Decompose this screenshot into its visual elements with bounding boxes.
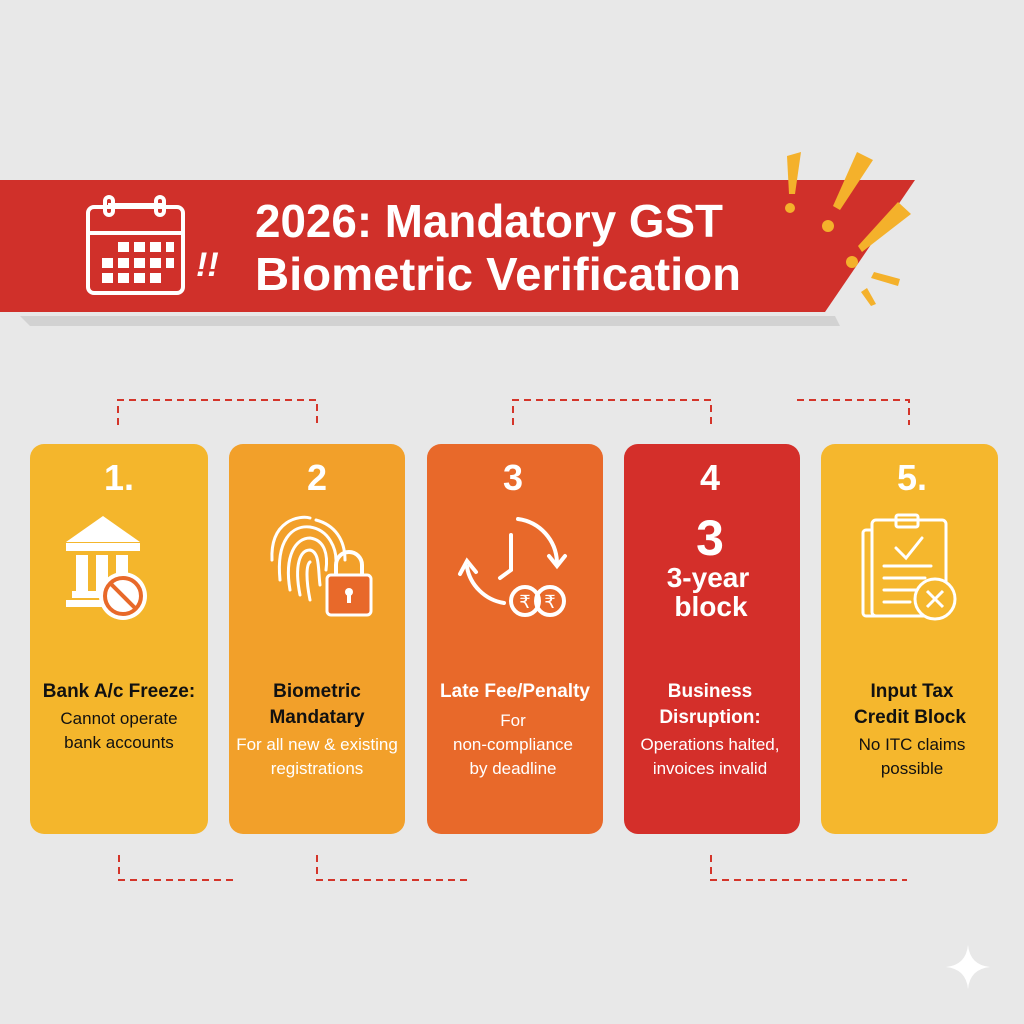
icon: exclamation burst (785, 152, 911, 306)
panel: 2 biometric: Mandatary (269, 707, 365, 728)
title text: 2026: Mandatory GST (255, 195, 723, 247)
panel: 2 biometric: registrations (271, 759, 363, 778)
panel: 4 business disruption: 4 (700, 457, 720, 498)
panel: 5 ITC block: No ITC claims (859, 735, 965, 754)
title banner: Biometric Verification (255, 248, 741, 300)
panel: 4 business disruption: invoices invalid (653, 759, 767, 778)
panel: 2 biometric: Biometric (273, 681, 361, 702)
icon: bank with ban (66, 516, 147, 620)
icon: fingerprint lock (272, 517, 345, 600)
panel: 4 business disruption: block (674, 591, 748, 622)
panel: 5 ITC block (821, 444, 998, 834)
panel: 3 late fee (427, 444, 603, 834)
panel: 1 bank freeze: Bank A/c Freeze: (43, 681, 195, 702)
panel: 4 business disruption: Operations halted, (641, 735, 779, 754)
dashed connectors (118, 400, 909, 880)
panel: 1 bank freeze: Cannot operate (60, 709, 178, 728)
panel: 3 late fee: Late Fee/Penalty (440, 681, 590, 702)
panel: 2 biometric: For all new & existing (236, 735, 398, 754)
panel: 5 ITC block: possible (881, 759, 943, 778)
panel: 2 biometric: 2 (307, 457, 327, 498)
panel: 4 business disruption: Disruption: (659, 707, 761, 728)
panel: 2 biometric (229, 444, 405, 834)
title banner (0, 180, 915, 326)
panel: 3 late fee: by deadline (470, 759, 556, 778)
panel: 1 bank freeze (30, 444, 208, 834)
icon: calendar (88, 197, 183, 293)
panel: 4 business disruption: Business (668, 681, 752, 702)
icon: clock cycle with rupee coins (460, 519, 565, 615)
panel: 5 ITC block: 5. (897, 457, 927, 498)
panel: 4 business disruption: 3-year (667, 562, 749, 593)
panel: 1 bank freeze: 1. (104, 457, 134, 498)
panel: 4 business disruption: 3 (696, 510, 724, 566)
icon: sparkle (946, 945, 990, 989)
panel: 3 late fee: non-compliance (453, 735, 573, 754)
icon: clipboard with x (863, 515, 946, 616)
panel: 3 late fee: 3 (503, 457, 523, 498)
panel: 3 late fee: ₹ (544, 592, 556, 612)
title banner: !! (196, 246, 219, 284)
panel: 4 business disruption (624, 444, 800, 834)
panel: 5 ITC block: Input Tax (870, 681, 954, 702)
panel: 3 late fee: For (500, 711, 526, 730)
panel: 5 ITC block: Credit Block (854, 707, 966, 728)
panel: 1 bank freeze: bank accounts (64, 733, 174, 752)
panel: 3 late fee: ₹ (519, 592, 531, 612)
